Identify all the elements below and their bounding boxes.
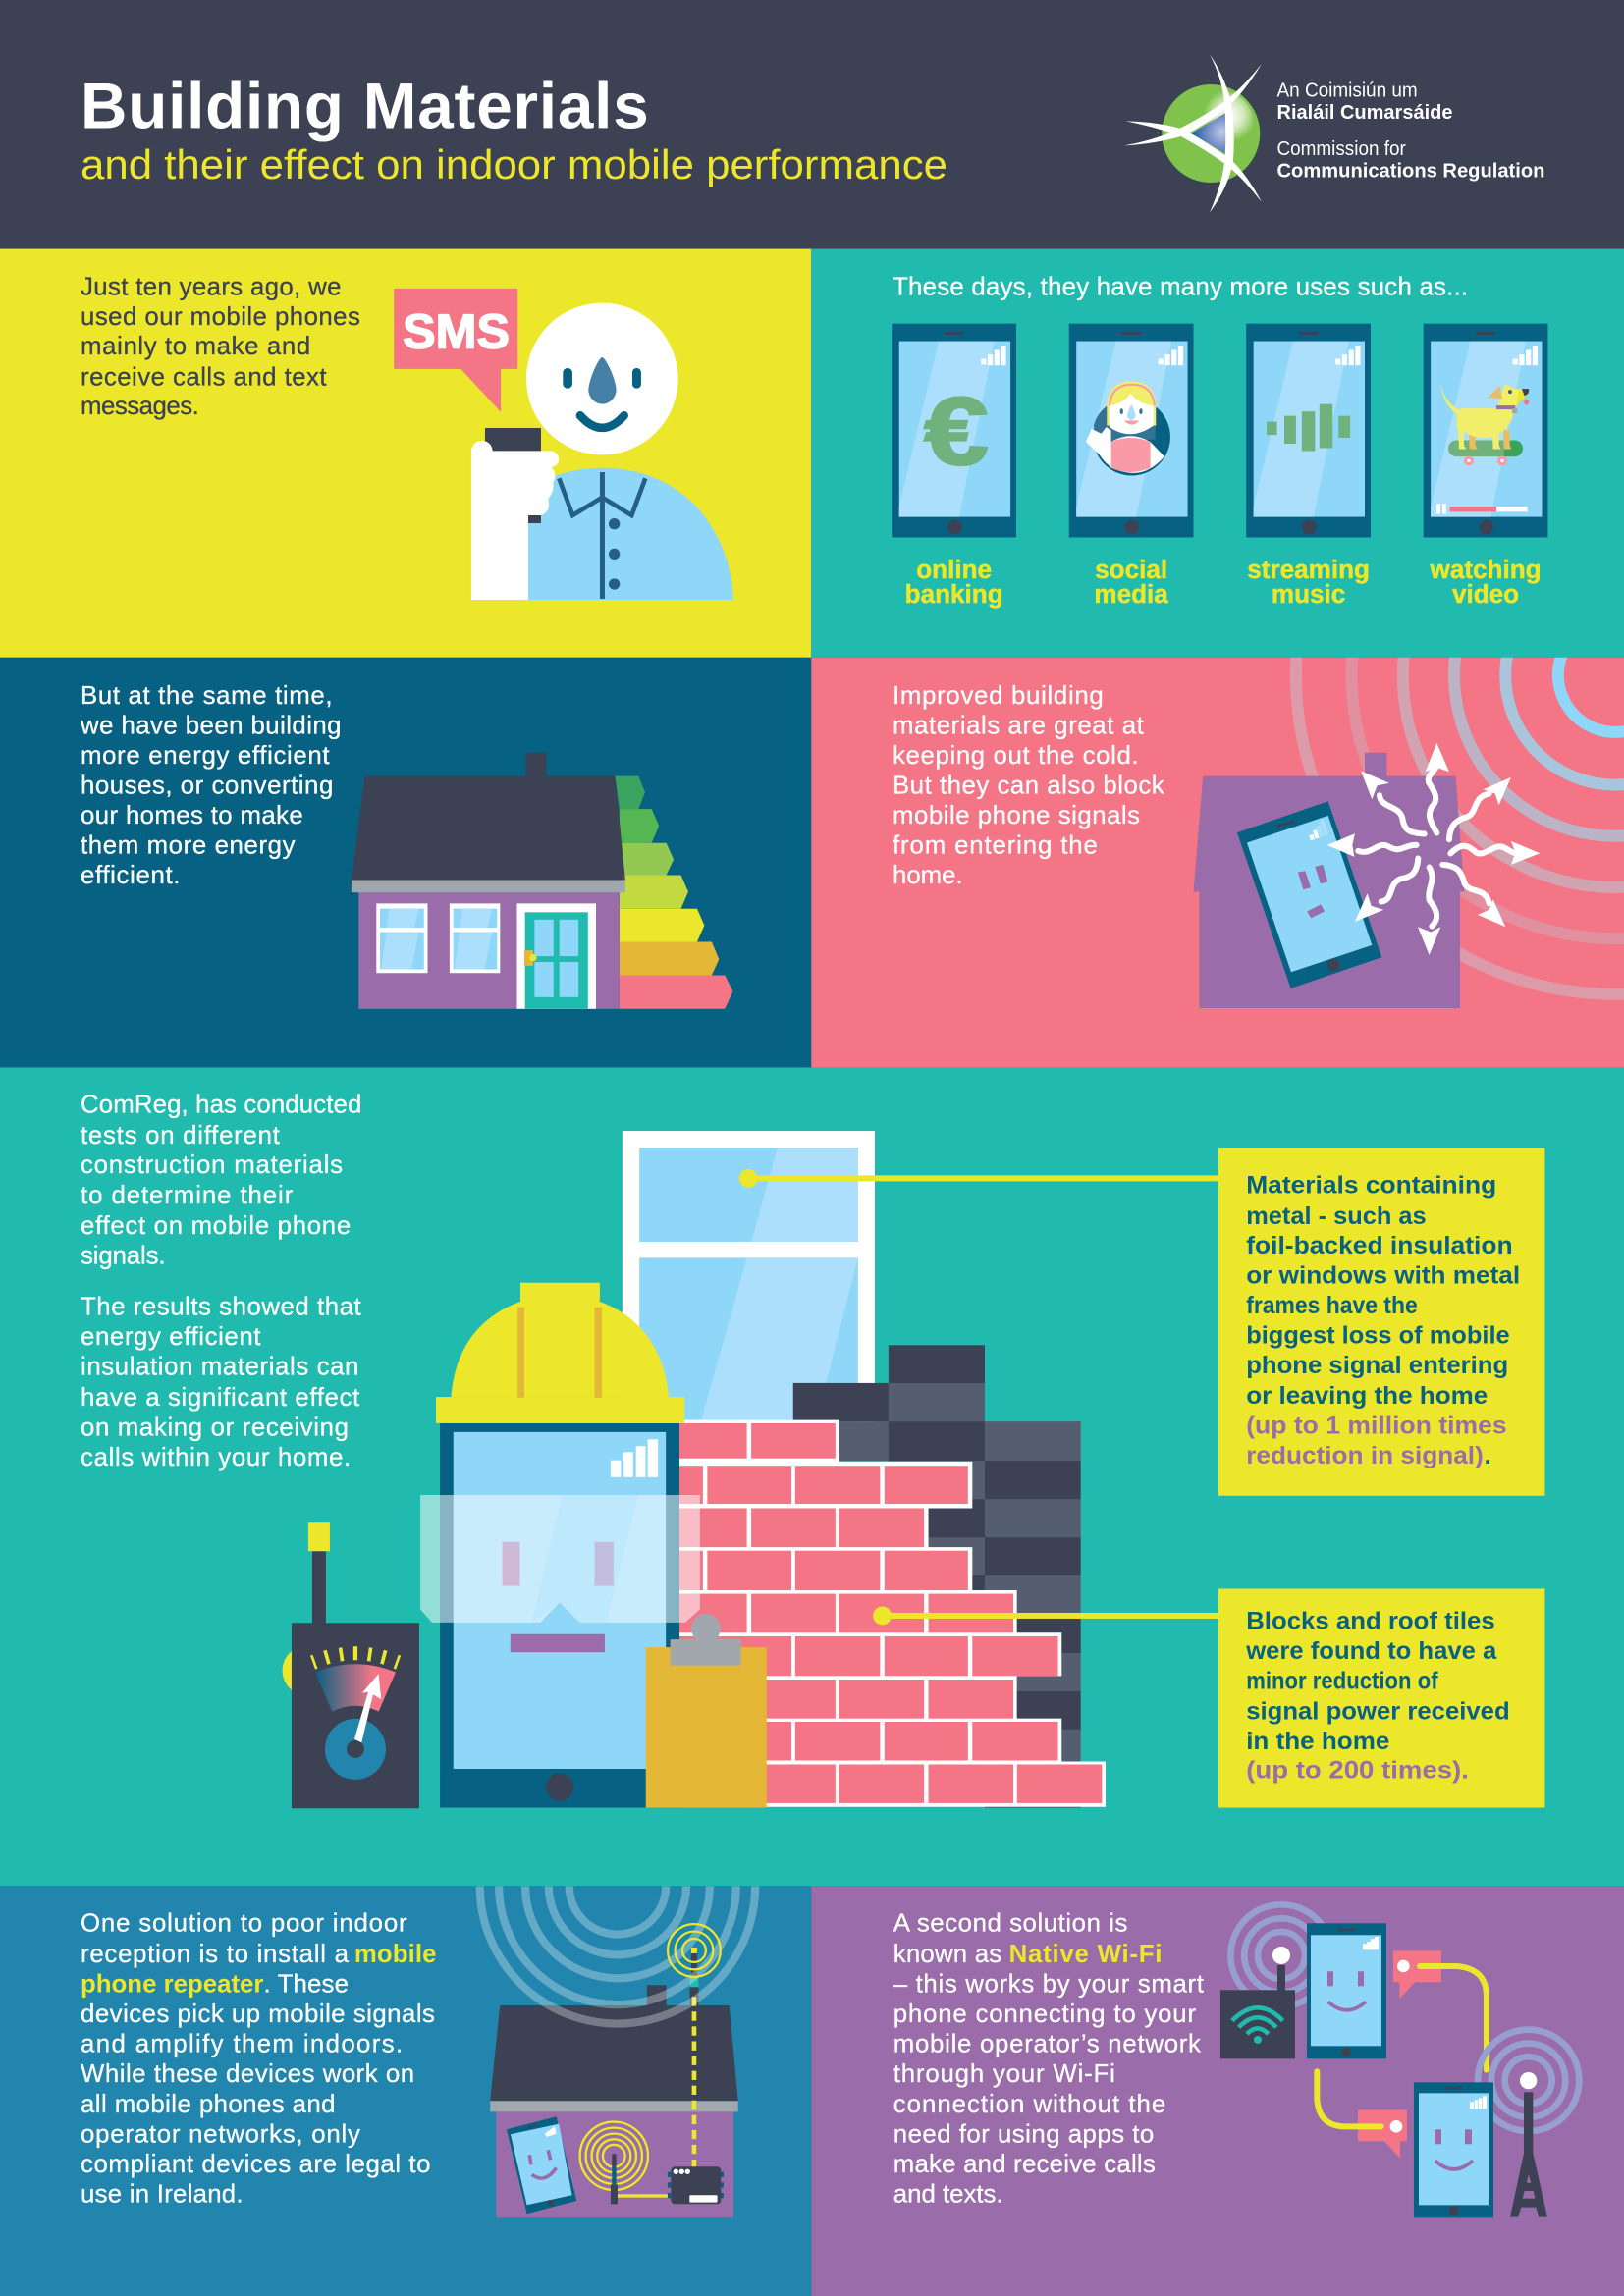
labels: phone uses [905, 555, 1542, 609]
text: improved materials: Improved building [893, 682, 1104, 710]
icon: smartphone bottom [1414, 2082, 1493, 2217]
text: tests intro: effect on mobile phone [81, 1212, 351, 1240]
title: Building Materials [81, 71, 649, 142]
phone: online banking [892, 324, 1016, 537]
illustration: person with phone [471, 303, 733, 600]
icon: message bubble bottom [1358, 2109, 1407, 2159]
labels: phone uses: video [1452, 579, 1519, 609]
callout: metal materials: frames have the [1246, 1292, 1418, 1319]
panel: native wi-fi [811, 1886, 1624, 2296]
icon: SMS speech bubble: SMS [403, 304, 510, 358]
text: tests intro: on making or receiving [81, 1415, 349, 1442]
callout: blocks and tiles: Blocks and roof tiles [1246, 1608, 1495, 1635]
callout: blocks and tiles: were found to have a [1245, 1637, 1497, 1665]
callout: blocks and tiles: signal power received [1246, 1697, 1510, 1725]
text: repeater [81, 1910, 436, 2209]
diagram: native wi-fi connection [1220, 1904, 1579, 2217]
text: ten years ago: receive calls and text [81, 363, 327, 391]
icon: radiating signal arrows [1327, 743, 1540, 955]
text: tests intro: construction materials [81, 1151, 343, 1179]
text: native wi-fi: through your Wi-Fi [893, 2060, 1115, 2088]
callout: blocks and tiles [1218, 1589, 1544, 1808]
callout line: bricks [873, 1607, 1218, 1625]
callout: metal materials: foil-backed insulation [1246, 1232, 1513, 1259]
icon: signal rings [1290, 658, 1624, 1000]
callout: metal materials: metal - such as [1246, 1202, 1427, 1230]
text: native wi-fi: – this works by your smart [893, 1970, 1204, 1998]
text: native wi-fi: need for using apps to [893, 2120, 1154, 2148]
labels: phone uses: banking [905, 579, 1003, 609]
callout: blocks and tiles: minor reduction of [1246, 1668, 1438, 1695]
callout: metal materials [1218, 1148, 1544, 1496]
text: native wi-fi: and texts. [893, 2181, 1003, 2209]
illustration: repeater house [475, 1886, 760, 2218]
text: ten years ago: Just ten years ago, we [81, 274, 342, 301]
text: repeater: all mobile phones and [81, 2091, 336, 2118]
illustration: tilted phone [1237, 801, 1381, 988]
text: tests intro: insulation materials can [81, 1354, 358, 1381]
labels: phone uses: online [916, 555, 992, 584]
illustration: hard hat [436, 1283, 684, 1423]
icon: SMS speech bubble [394, 289, 517, 412]
illustration: dark block wall [793, 1345, 1081, 1808]
text: energy efficient: we have been building [80, 712, 342, 739]
phone: streaming music [1246, 324, 1371, 537]
callout: metal materials: biggest loss of mobile [1246, 1322, 1510, 1350]
icon: indoor phone [507, 2116, 576, 2214]
text: tests intro: have a significant effect [81, 1384, 359, 1412]
text: tests intro: energy efficient [81, 1323, 260, 1351]
callout line: window [739, 1169, 1218, 1188]
text: energy efficient: our homes to make [81, 802, 303, 829]
callout: blocks and tiles: (up to 200 times). [1246, 1757, 1469, 1785]
text: energy efficient: efficient. [81, 862, 180, 889]
text: native wi-fi: phone connecting to your [893, 2001, 1196, 2028]
callout: metal materials: phone signal entering [1246, 1352, 1508, 1379]
text: tests intro: to determine their [81, 1182, 294, 1209]
callout: metal materials: . [1485, 1442, 1491, 1469]
text: native wi-fi: A second solution is [893, 1910, 1127, 1938]
logo: ComReg: Commission for [1277, 138, 1406, 160]
text: energy efficient: them more energy [81, 832, 296, 860]
callout: blocks and tiles: in the home [1246, 1728, 1389, 1755]
text: tests intro: signals. [81, 1242, 166, 1269]
panel: header [0, 0, 1624, 249]
text: native wi-fi: make and receive calls [893, 2151, 1156, 2178]
phone: online banking: € [924, 377, 989, 485]
text: tests intro: tests on different [81, 1122, 280, 1149]
text: native wi-fi: known as [893, 1941, 1001, 1968]
text: improved materials: mobile phone signals [893, 802, 1140, 829]
labels: phone uses: watching [1430, 555, 1542, 584]
text: native wi-fi: Native Wi-Fi [1009, 1941, 1162, 1968]
text: repeater: mobile [354, 1941, 436, 1968]
text: ten years ago [81, 274, 360, 420]
icon: smartphone top [1307, 1923, 1386, 2058]
text: improved materials: home. [893, 862, 963, 889]
text: improved materials: keeping out the cold. [893, 742, 1139, 770]
text: ten years ago: messages. [81, 393, 199, 420]
illustration: signal meter [283, 1522, 419, 1808]
text: improved materials: But they can also block [893, 773, 1164, 800]
text: repeater: devices pick up mobile signals [81, 2001, 435, 2028]
phone: social media [1069, 324, 1194, 537]
text: improved materials: materials are great at [893, 712, 1144, 739]
text: native wi-fi: connection without the [893, 2091, 1165, 2118]
illustration: brick wall [679, 1420, 1106, 1807]
logo: ComReg [1124, 54, 1544, 213]
arrow: connection bottom [1317, 2071, 1381, 2126]
icon: wi-fi router [1220, 1904, 1332, 2058]
icon: roof antenna rings [668, 1924, 721, 1977]
subtitle: and their effect on indoor mobile performance [81, 141, 947, 187]
text: tests intro: ComReg, has conducted [81, 1092, 361, 1119]
text: improved materials: from entering the [893, 832, 1098, 860]
text: tests intro [81, 1092, 361, 1471]
text: tests intro: calls within your home. [81, 1444, 351, 1471]
text: repeater: use in Ireland. [81, 2181, 244, 2209]
text: these days: These days, they have many more uses such as... [893, 274, 1468, 301]
text: repeater: phone repeater [81, 1970, 263, 1998]
logo: ComReg: An Coimisiún um [1277, 80, 1418, 101]
callout: metal materials: Materials containing [1246, 1172, 1496, 1200]
icon: repeater box [668, 2166, 724, 2204]
text: energy efficient [80, 682, 342, 889]
text: repeater: and amplify them indoors. [81, 2031, 403, 2058]
text: native wi-fi: mobile operator’s network [893, 2031, 1201, 2058]
panel: ten years ago [0, 249, 811, 658]
text: tests intro: The results showed that [81, 1294, 361, 1321]
text: energy efficient: more energy efficient [81, 742, 330, 770]
callout: metal materials: or windows with metal [1246, 1261, 1520, 1289]
labels: phone uses: media [1094, 579, 1168, 609]
text: native wi-fi [893, 1910, 1204, 2209]
text: repeater: operator networks, only [81, 2120, 360, 2148]
icon: repeater signal rings [475, 1886, 760, 2028]
panel: signal blocked [811, 658, 1624, 1068]
illustration: safety goggles [420, 1495, 700, 1623]
text: repeater: While these devices work on [81, 2060, 414, 2088]
text: energy efficient: But at the same time, [81, 682, 333, 710]
callout: metal materials: (up to 1 million times [1246, 1412, 1507, 1439]
panel: many more uses [811, 249, 1624, 658]
labels: phone uses: music [1272, 579, 1345, 609]
illustration: clipboard [646, 1614, 767, 1808]
text: repeater: reception is to install a [81, 1941, 350, 1968]
panel: mobile phone repeater [0, 1886, 811, 2296]
text: ten years ago: mainly to make and [81, 333, 310, 360]
callout: metal materials: or leaving the home [1246, 1382, 1488, 1410]
panel: ComReg tests [0, 1067, 1624, 1886]
panel: energy efficient houses [0, 658, 811, 1067]
illustration: house [352, 753, 625, 1009]
labels: phone uses: streaming [1247, 555, 1370, 584]
icon: mobile tower [1478, 2030, 1579, 2217]
chart: energy rating bars [615, 776, 732, 1009]
text: repeater: compliant devices are legal to [81, 2151, 430, 2178]
text: ten years ago: used our mobile phones [81, 303, 360, 331]
illustration: window [623, 1131, 875, 1423]
text: energy efficient: houses, or converting [81, 773, 333, 800]
logo: ComReg: Communications Regulation [1277, 160, 1544, 182]
illustration: smiling phone [440, 1423, 679, 1808]
text: repeater: . These [263, 1970, 349, 1998]
phone: watching video [1424, 324, 1547, 537]
icon: indoor antenna [580, 2122, 672, 2204]
arrow: connection top [1420, 1966, 1487, 2070]
text: improved materials [893, 682, 1164, 889]
callout: metal materials: reduction in signal) [1246, 1442, 1484, 1469]
text: repeater: One solution to poor indoor [81, 1910, 407, 1938]
icon: message bubble top [1393, 1950, 1441, 1999]
labels: phone uses: social [1095, 555, 1167, 584]
illustration: purple house [1194, 753, 1464, 1008]
logo: ComReg: Rialáil Cumarsáide [1277, 102, 1453, 124]
